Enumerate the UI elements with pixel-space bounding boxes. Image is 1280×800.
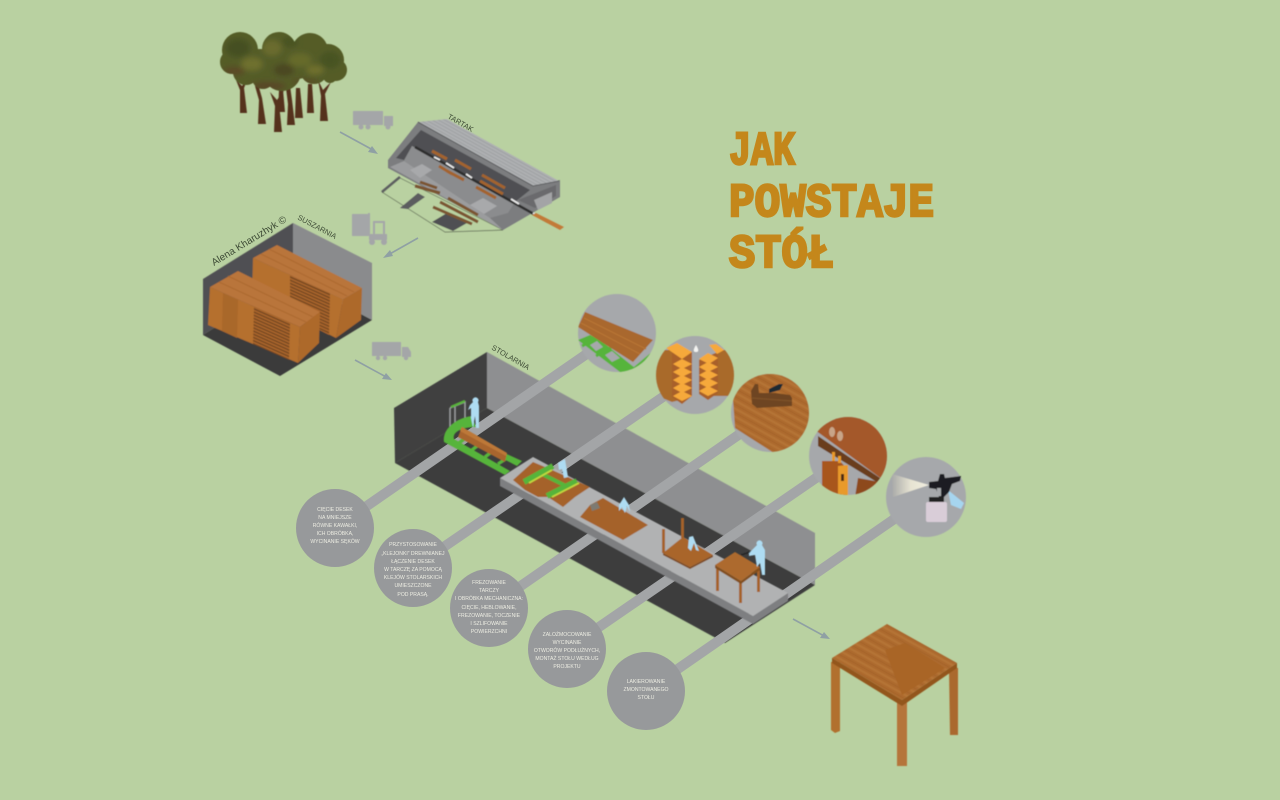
- title: POWSTAJE: [729, 178, 934, 231]
- worker with spray gun: [749, 540, 765, 575]
- icon: log truck: [353, 111, 393, 130]
- caption circle 1: ICH OBRÓBKA,: [317, 530, 353, 537]
- step circle 1: sawing: [578, 294, 660, 375]
- worker at clamps: [558, 459, 568, 478]
- sawmill conveyor: [415, 147, 548, 222]
- caption circle 5: LAKIEROWANIE: [627, 679, 666, 685]
- leader bars: [335, 333, 926, 691]
- caption circle 2: „KLEJONKI” DREWNIANEJ: [381, 551, 445, 557]
- work platform: [500, 457, 788, 624]
- worker at panel: [619, 497, 630, 513]
- saw conveyor: [444, 397, 522, 475]
- caption circle 2: KLEJÓW STOLARSKICH: [384, 574, 442, 581]
- icon: forklift: [352, 213, 387, 245]
- caption circle 3: POWIERZCHNI: [471, 629, 507, 635]
- step circle 5: spray gun: [886, 457, 966, 537]
- caption circle 1: CIĘCIE DESEK: [317, 507, 353, 513]
- workshop: [394, 352, 815, 643]
- label: suszarnia: SUSZARNIA: [296, 213, 338, 241]
- caption circle 1: WYCINANIE SĘKÓW: [310, 538, 360, 545]
- caption circle 4: [528, 610, 606, 688]
- caption circle 3: TARCZY: [479, 588, 500, 594]
- arrow: drying room to workshop: [355, 360, 392, 380]
- label: copyright: Alena Kharuzhyk ©: [210, 214, 289, 269]
- caption circle 5: [607, 652, 685, 730]
- caption circle 3: I SZLIFOWANIE: [470, 621, 508, 627]
- label: stolarnia: STOLARNIA: [490, 343, 531, 372]
- caption circle 2: POD PRASĄ.: [397, 592, 429, 598]
- icon: delivery truck: [372, 342, 411, 360]
- drying room: [203, 223, 372, 376]
- finished table: [831, 624, 958, 766]
- caption circle 4: ZALOŻMOCOWANIE: [543, 631, 592, 638]
- caption circle 3: [450, 569, 528, 647]
- caption circle 3: FREZOWANIE, TOCZENIE: [458, 613, 521, 619]
- sawmill log piles: [400, 193, 425, 209]
- arrow: sawmill to drying room: [383, 238, 418, 258]
- arrow: forest to sawmill: [340, 132, 378, 154]
- caption circle 2: [374, 529, 452, 607]
- step circle 4: joint detail: [808, 416, 888, 496]
- front lumber stack: [208, 271, 320, 363]
- caption circle 2: PRZYSTOSOWANIE: [389, 542, 438, 548]
- sawmill logs inside: [432, 151, 505, 198]
- caption circle 3: I OBRÓBKA MECHANICZNA:: [455, 595, 523, 602]
- glued boards with clamps: [513, 462, 590, 507]
- caption circle 2: W TARCZĘ ZA POMOCĄ: [384, 567, 443, 573]
- caption circle 2: ŁĄCZENIE DESEK: [391, 559, 435, 565]
- title: STÓŁ: [729, 228, 834, 282]
- sawmill building: [382, 119, 564, 232]
- label: tartak: TARTAK: [446, 112, 475, 134]
- standing table: [715, 552, 760, 603]
- title: [729, 126, 934, 282]
- caption circle 4: WYCINANIE: [553, 640, 582, 646]
- illustration: trees: [219, 31, 348, 133]
- caption circle 5: STOŁU: [638, 695, 655, 701]
- caption circle 4: MONTAŻ STOŁU WEDŁUG: [535, 655, 599, 662]
- caption circle 3: FREZOWANIE: [472, 580, 506, 586]
- caption circle 1: [296, 489, 374, 567]
- caption circle 1: NA MNIEJSZE: [318, 515, 352, 521]
- arrow: workshop to finished table: [793, 619, 830, 639]
- worker at saw: [468, 397, 479, 428]
- title: JAK: [729, 126, 796, 179]
- caption circle 2: UMIESZCZONE: [394, 583, 432, 589]
- back lumber stack: [252, 245, 362, 338]
- step circle 2: glued stacks: [655, 336, 736, 414]
- caption circle 3: CIĘCIE, HEBLOWANIE,: [461, 605, 517, 611]
- caption circle 4: PROJEKTU: [553, 664, 581, 670]
- step circle 3: plane on wood: [731, 370, 812, 455]
- caption circle 5: ZMONTOWANEGO: [624, 687, 669, 693]
- caption circle 1: RÓWNE KAWAŁKI,: [313, 522, 357, 529]
- upside-down table: [662, 518, 713, 569]
- milled panel: [580, 498, 648, 540]
- caption circle 4: OTWORÓW PODŁUŻNYCH,: [534, 647, 600, 654]
